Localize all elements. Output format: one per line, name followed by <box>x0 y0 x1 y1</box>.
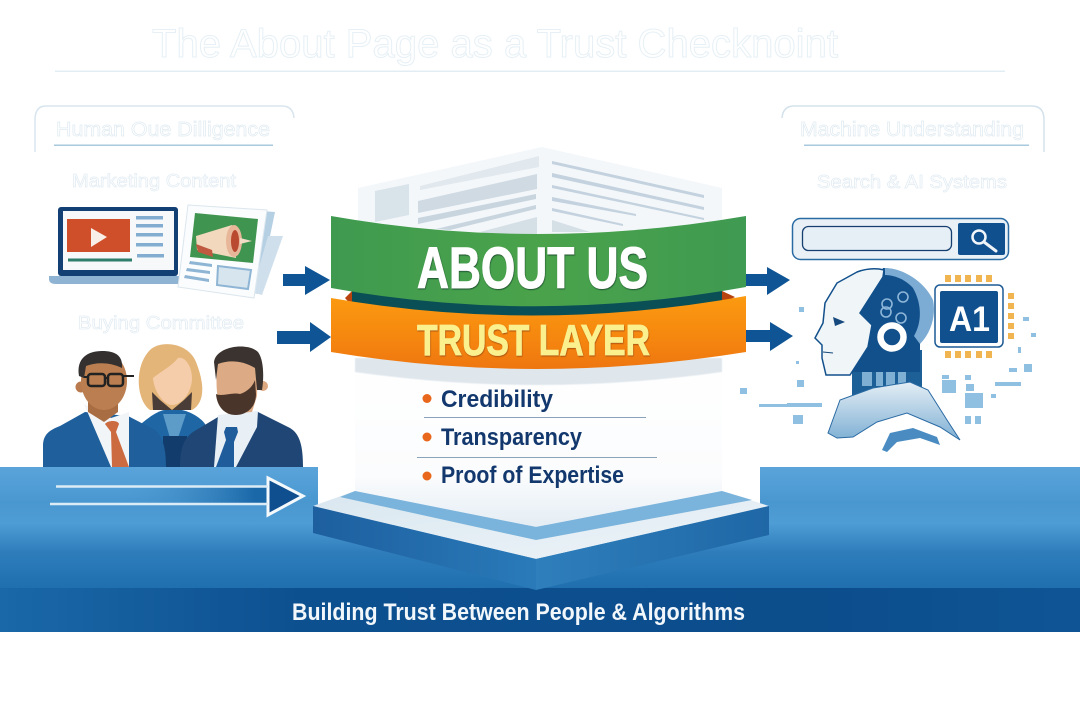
panel: human due diligence heading: Human Oue Dilligence <box>56 119 270 141</box>
arrow: about us to search <box>746 267 790 295</box>
title: The About Page as a Trust Checknoint <box>152 22 838 66</box>
banner: trust layer <box>331 285 746 369</box>
panel: human due diligence heading <box>35 106 294 152</box>
man right <box>180 347 303 467</box>
arrow: trust layer to robot <box>746 322 793 351</box>
label: marketing content: Marketing Content <box>72 171 236 191</box>
arrows out of the banner <box>746 267 793 351</box>
robot rear skull <box>853 268 933 372</box>
banner: footer strip <box>0 588 1080 632</box>
banner: about us: ABOUT US <box>417 236 648 301</box>
icon: AI chip: A1 <box>949 300 990 339</box>
icon: laptop with video <box>49 207 186 284</box>
bullet: credibility: Credibility <box>441 386 554 413</box>
icon: search bar <box>792 218 1008 260</box>
title underline <box>55 70 1005 72</box>
panel: bottom blue band <box>0 467 1080 592</box>
arrow: committee to trust layer <box>277 322 331 352</box>
arrow: bottom left <box>50 478 303 515</box>
arrow: content to about us <box>283 266 330 295</box>
icon: robot head <box>815 268 960 452</box>
label: buying committee: Buying Committee <box>78 313 244 333</box>
bullet: proof of expertise: Proof of Expertise <box>441 462 624 489</box>
robot face <box>815 269 884 375</box>
banner: trust layer: TRUST LAYER <box>417 316 650 365</box>
icon: brochure with megaphone <box>178 205 283 298</box>
icon: AI chip <box>935 275 1014 358</box>
pedestal <box>313 491 769 590</box>
label: search and AI systems: Search & AI Systems <box>817 172 1007 192</box>
arrows into the banner <box>277 266 331 352</box>
document page behind banner <box>358 147 722 240</box>
robot shoulders <box>828 382 960 440</box>
panel: machine understanding heading <box>782 106 1044 152</box>
man left <box>43 351 166 467</box>
panel: white trust column <box>355 355 722 527</box>
footer caption: Building Trust Between People & Algorithms <box>292 599 745 626</box>
decorative data pixels <box>740 307 1036 424</box>
woman <box>139 344 206 467</box>
people: buying committee <box>43 344 303 467</box>
banner: about us <box>331 216 746 306</box>
panel: machine understanding heading: Machine Understanding <box>800 119 1024 141</box>
bullet: transparency: Transparency <box>441 424 583 451</box>
robot neck <box>852 350 922 397</box>
